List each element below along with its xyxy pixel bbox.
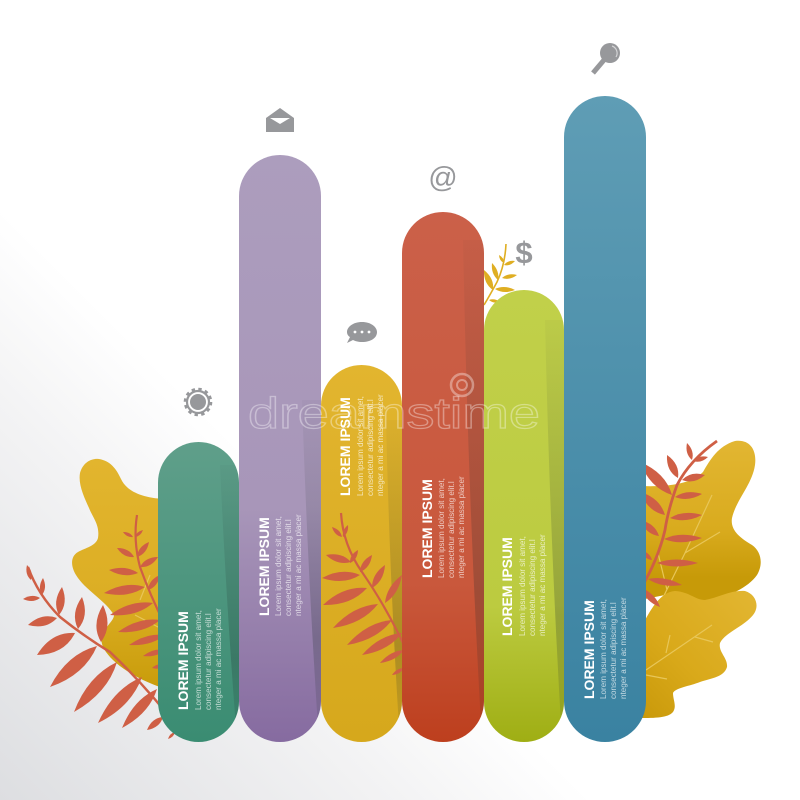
bar 2 body text: Lorem ipsum dolor sit amet, — [274, 516, 283, 616]
bar 3 body text: nteger a mi ac massa placer — [376, 394, 385, 496]
bar 6 body text: nteger a mi ac massa placer — [619, 597, 628, 699]
bar 2: purple — [239, 155, 322, 742]
bar 4 body text: Lorem ipsum dolor sit amet, — [437, 478, 446, 578]
right yellow leaf lower — [640, 591, 757, 718]
bar 2 body text: nteger a mi ac massa placer — [294, 514, 303, 616]
right leaf veins lower — [646, 625, 713, 679]
watermark — [248, 374, 540, 438]
bar 3 heading: LOREM IPSUM — [337, 397, 353, 496]
bar 6: blue — [564, 96, 646, 742]
icon: dollar sign: $ — [515, 235, 533, 270]
bar 3 body text — [356, 394, 385, 496]
bar 4 heading: LOREM IPSUM — [419, 479, 435, 578]
bar 3 body text: Lorem ipsum dolor sit amet, — [356, 396, 365, 496]
bar 6 heading: LOREM IPSUM — [581, 600, 597, 699]
bar 1 body text — [194, 608, 223, 710]
bar 1 heading: LOREM IPSUM — [175, 611, 191, 710]
bar 2 body text — [274, 514, 303, 616]
bar 4 body text: nteger a mi ac massa placer — [457, 476, 466, 578]
icon: magnifier — [593, 43, 620, 73]
icon: gear — [185, 389, 211, 415]
bar 5 body text: nteger a mi ac massa placer — [538, 534, 547, 636]
fern: gold sprig — [481, 244, 518, 305]
right yellow leaf upper — [640, 441, 761, 602]
fern: on left leaf — [103, 515, 166, 670]
bar 1 body text: consectetur adipiscing elit.l — [204, 613, 213, 710]
bar 4 body text — [437, 476, 466, 578]
bar 3: yellow — [321, 365, 403, 742]
bar 2 body text: consectetur adipiscing elit.l — [284, 519, 293, 616]
bar 5 body text: Lorem ipsum dolor sit amet, — [518, 536, 527, 636]
bar 1 body text: Lorem ipsum dolor sit amet, — [194, 610, 203, 710]
bar 3 body text: consectetur adipiscing elit.l — [366, 399, 375, 496]
bar 1 body text: nteger a mi ac massa placer — [214, 608, 223, 710]
icon: envelope — [266, 108, 294, 132]
fern: bottom left — [23, 564, 180, 740]
bar 5: lime — [484, 290, 565, 742]
icon: speech bubble — [347, 322, 377, 343]
bar 5 heading: LOREM IPSUM — [499, 537, 515, 636]
fern: on yellow bar — [321, 513, 406, 676]
fern: right — [636, 441, 717, 609]
watermark: dreamstime — [248, 389, 540, 438]
bar 1: green — [158, 442, 240, 742]
bar 5 body text: consectetur adipiscing elit.l — [528, 539, 537, 636]
bar 6 body text: consectetur adipiscing elit.l — [609, 602, 618, 699]
left leaf veins — [135, 575, 160, 628]
left yellow leaf — [72, 459, 170, 690]
bar 4 body text: consectetur adipiscing elit.l — [447, 481, 456, 578]
right leaf veins upper — [646, 495, 720, 632]
bar 4: red — [402, 212, 485, 742]
bar 2 heading: LOREM IPSUM — [256, 517, 272, 616]
bar 6 body text — [599, 597, 628, 699]
bar 5 body text — [518, 534, 547, 636]
icon: at sign: @ — [428, 162, 458, 194]
bar 6 body text: Lorem ipsum dolor sit amet, — [599, 599, 608, 699]
